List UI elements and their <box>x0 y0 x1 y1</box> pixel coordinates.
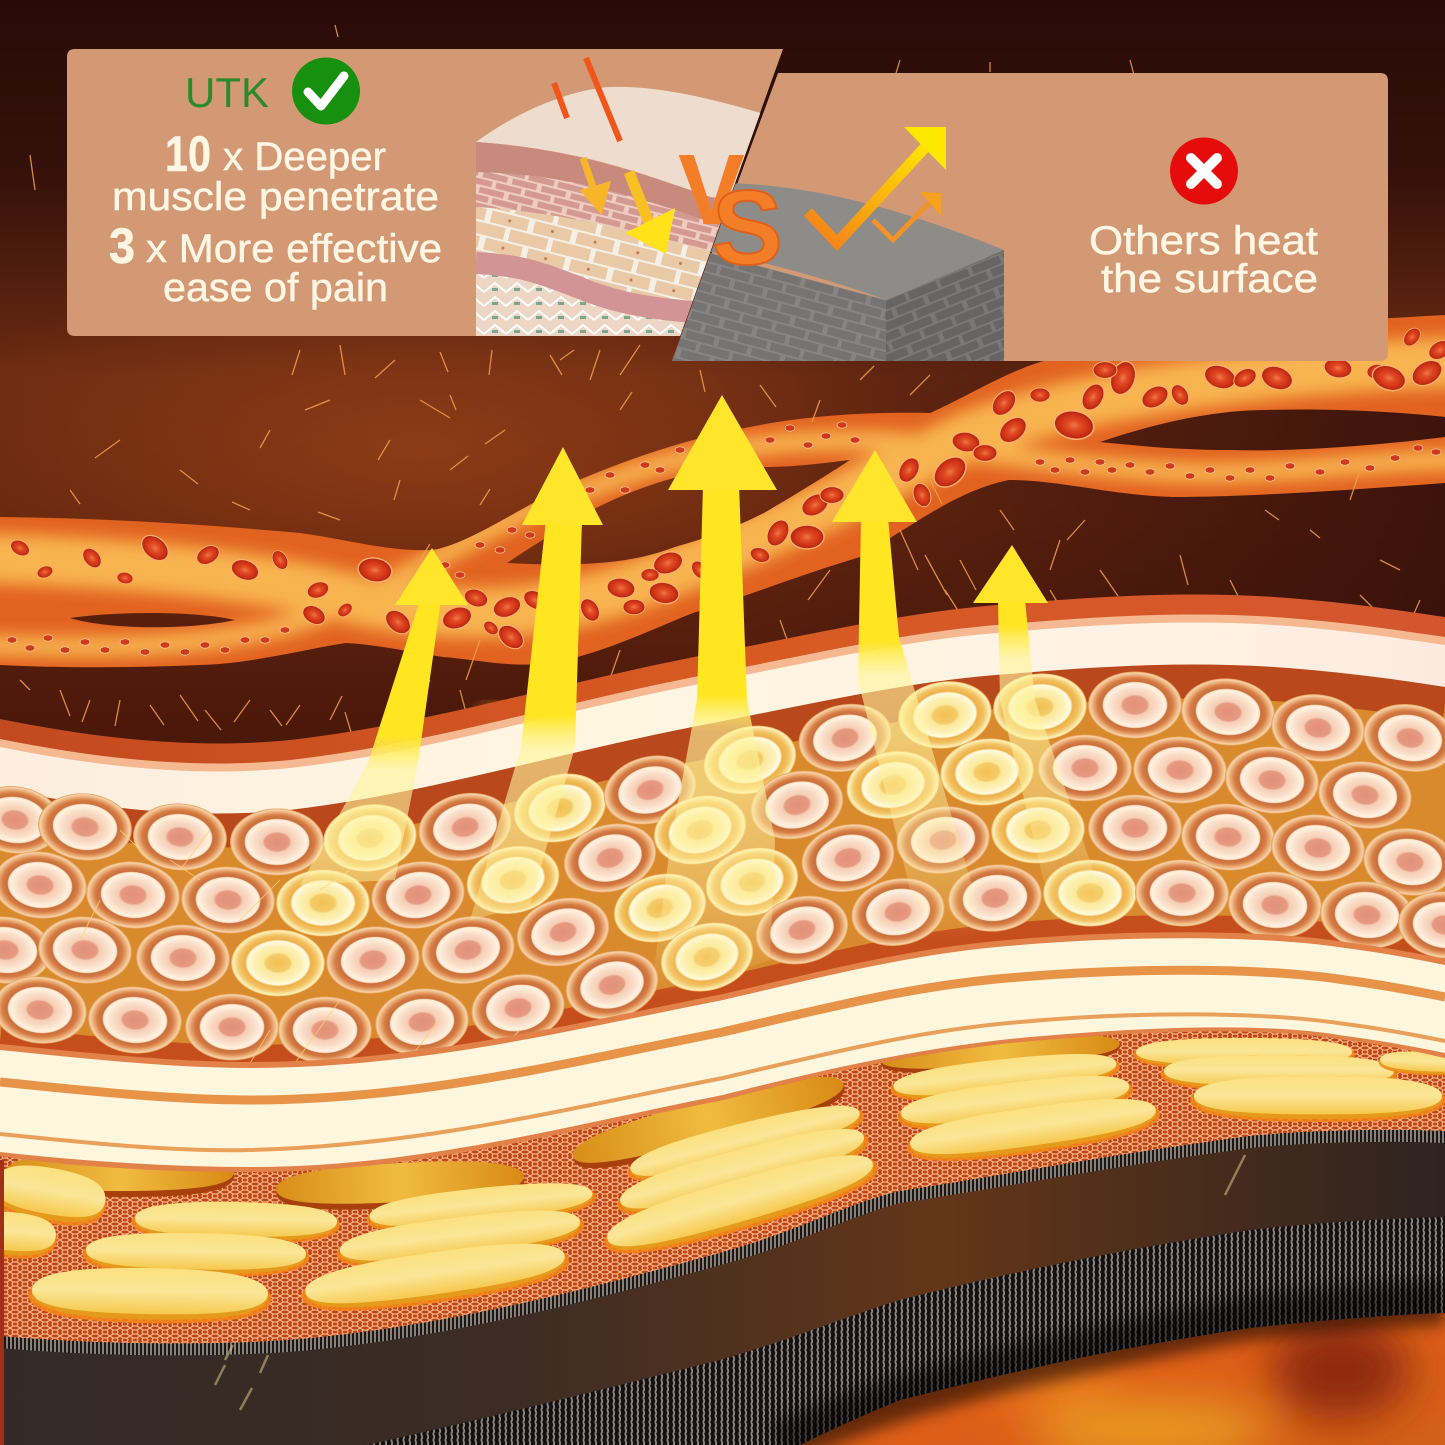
brand: UTK <box>185 69 269 116</box>
arrow 3 <box>650 395 777 1000</box>
stripe band shadow <box>780 1303 1445 1445</box>
mesh edge stripes <box>0 1136 1445 1349</box>
arrow 5 <box>973 545 1115 940</box>
text: surface heat <box>1089 219 1318 301</box>
arrow 1 <box>300 548 468 885</box>
arrow 2 <box>470 447 603 920</box>
cell grid <box>0 670 1445 1064</box>
text: more effective: x More effective <box>146 227 442 271</box>
vessel body <box>0 315 1445 667</box>
small flame <box>478 706 506 738</box>
comparison panel: UTK <box>67 49 790 340</box>
fabric body <box>0 1139 1445 1445</box>
cell layer base <box>0 670 1445 1200</box>
comparison panel: others <box>660 73 1388 361</box>
skin cross-section illustration <box>476 86 760 336</box>
skin tissue band with cells <box>0 595 1445 1200</box>
white skin layer <box>0 623 1445 1200</box>
text: surface heat: Others heat <box>1089 219 1318 263</box>
inner black stripe band <box>367 1217 1445 1445</box>
red blood cells, small <box>7 422 1441 655</box>
lower skin bands <box>0 932 1445 1172</box>
text: deeper penetration: 10 <box>165 126 211 182</box>
big rising arrow <box>808 127 946 243</box>
arrow 4 <box>832 450 985 950</box>
text: deeper penetration: muscle penetrate <box>112 175 439 219</box>
upper skin red layer <box>0 595 1445 1200</box>
text: more effective <box>109 218 442 310</box>
left edge strip <box>0 1160 4 1445</box>
penetrating arrow head <box>625 208 675 254</box>
icon: check <box>292 58 360 124</box>
text: more effective: ease of pain <box>163 266 388 310</box>
VS label: V <box>678 134 745 246</box>
icon: cross <box>1170 138 1238 204</box>
text: more effective: 3 <box>109 218 135 274</box>
heating mesh <box>0 1032 1445 1344</box>
blood vessels <box>0 315 1445 667</box>
peach layer <box>0 615 1445 1200</box>
VS label <box>678 134 783 287</box>
small penetrating arrow <box>583 158 606 208</box>
lens sparkles <box>215 1155 1245 1410</box>
large penetrating arrow <box>629 172 650 225</box>
text: deeper penetration <box>112 126 439 219</box>
fine sparks over cells <box>80 830 520 1080</box>
red blood cells, large <box>8 325 1445 654</box>
vessel golden core <box>0 362 1445 647</box>
glowing flame opening <box>800 1313 1445 1445</box>
small rising arrow <box>873 192 941 240</box>
orange heat rays <box>554 58 620 141</box>
VS label: S <box>712 169 783 287</box>
top and bottom cell-layer tints <box>0 682 1445 1060</box>
text: surface heat: the surface <box>1101 257 1318 301</box>
heated pads <box>0 1030 1445 1325</box>
yellow heat arrows <box>300 395 1115 1000</box>
heat sparks <box>20 25 1420 732</box>
back plate: mesh, pads and fabric <box>0 1032 1445 1445</box>
text: deeper penetration: x Deeper <box>223 135 386 179</box>
grey skin illustration <box>660 183 1004 361</box>
